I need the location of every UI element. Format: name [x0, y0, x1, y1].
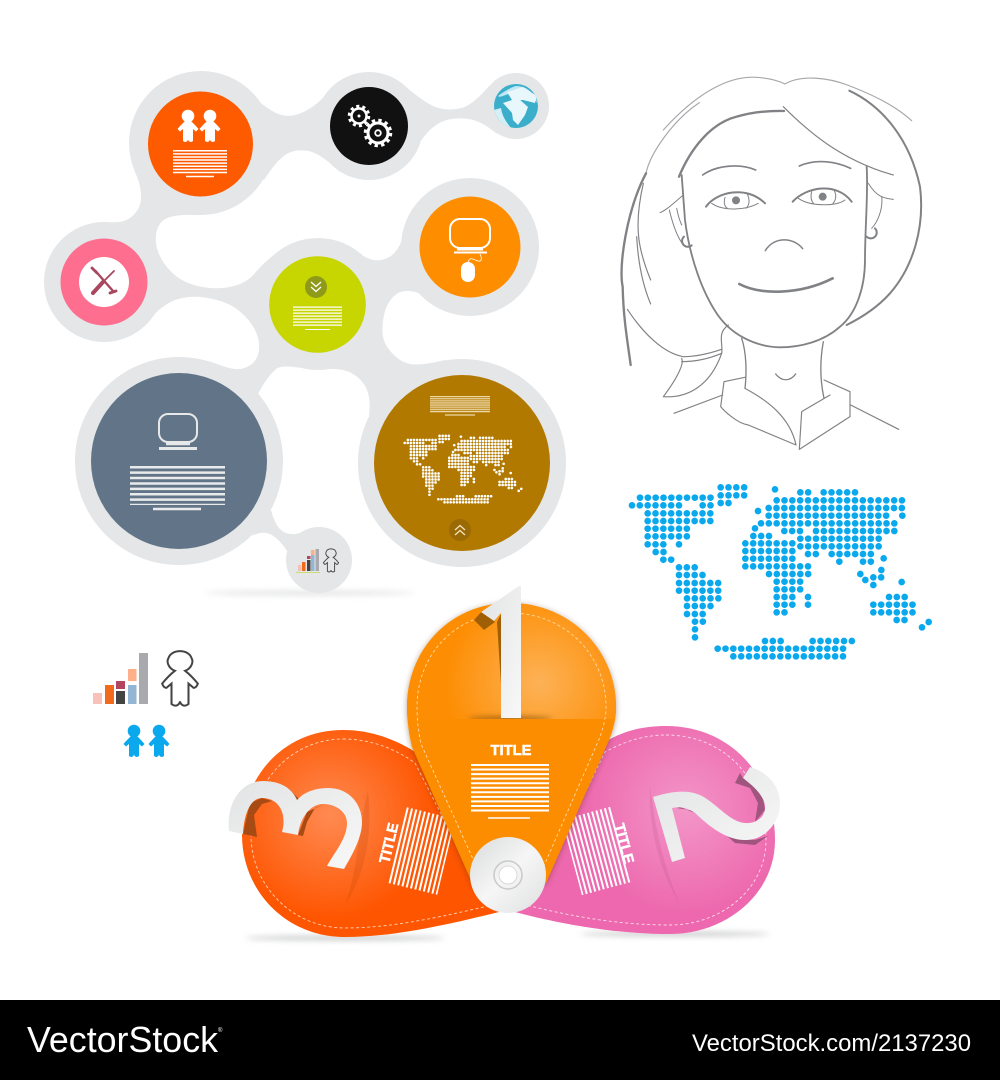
hub disc	[470, 837, 546, 913]
text lines	[305, 306, 330, 330]
title and text lines: TITLE	[610, 822, 637, 866]
icon: monitor and mouse	[450, 219, 490, 282]
brand name: VectorStock	[27, 1019, 219, 1060]
number 3	[229, 781, 362, 869]
circle: pink tools	[60, 238, 148, 326]
face outline	[682, 167, 867, 347]
icon: crossed wrench and screwdriver	[92, 268, 116, 293]
nose	[765, 240, 803, 251]
icon: gears	[350, 106, 390, 146]
text lines	[445, 396, 475, 415]
metaball circle network panel	[44, 71, 566, 596]
icon: two children	[178, 110, 220, 142]
circle: black gears	[330, 87, 408, 165]
ears and earrings	[660, 183, 893, 247]
icon: monitor	[159, 414, 197, 448]
circle: globe	[494, 84, 538, 129]
registered mark: ®	[218, 1027, 223, 1034]
petal 3 red	[242, 730, 499, 937]
dotted world map	[405, 436, 521, 502]
person outline	[323, 549, 339, 572]
eyebrows	[703, 162, 851, 175]
text lines	[186, 150, 214, 176]
icon: two blue children	[124, 725, 170, 757]
title and text lines	[376, 821, 451, 877]
dotted blue world map	[632, 487, 929, 656]
mini bar chart	[296, 549, 320, 572]
footer bar	[0, 1000, 1000, 1080]
icon: chevrons down	[305, 276, 327, 298]
grey connected backdrop	[44, 71, 566, 593]
title and text lines	[567, 822, 637, 877]
number 2	[653, 767, 780, 862]
image id: VectorStock.com/2137230	[692, 1030, 971, 1057]
eyes	[706, 188, 852, 209]
petal 2 pink	[515, 726, 775, 934]
icon: chevrons up	[449, 519, 471, 541]
text lines	[153, 466, 201, 509]
portrait line drawing of a woman	[622, 77, 921, 449]
bar chart icon	[93, 653, 148, 704]
title and text lines: TITLE	[376, 821, 402, 865]
circle: amber computer	[420, 196, 520, 298]
circle: small chart and person	[296, 549, 339, 572]
hair outline	[622, 77, 921, 397]
circle: lime chevrons and text	[269, 256, 366, 353]
circle: slate monitor and text	[91, 373, 267, 549]
upper gradient with slit shadow	[407, 604, 616, 719]
number 1	[474, 586, 521, 718]
three petal numbered diagram	[229, 586, 780, 940]
petal 1 orange	[407, 603, 616, 887]
circle: brown world map	[374, 375, 550, 551]
ground shadow under network	[205, 590, 415, 596]
title: TITLE	[490, 742, 532, 759]
ground shadows	[245, 932, 770, 940]
smile	[739, 278, 833, 292]
shirt collar	[674, 377, 899, 449]
stitching	[417, 613, 606, 868]
text lines	[488, 764, 530, 818]
neck	[742, 338, 824, 398]
circle: orange people	[148, 92, 253, 196]
icon: person outline	[162, 651, 198, 706]
